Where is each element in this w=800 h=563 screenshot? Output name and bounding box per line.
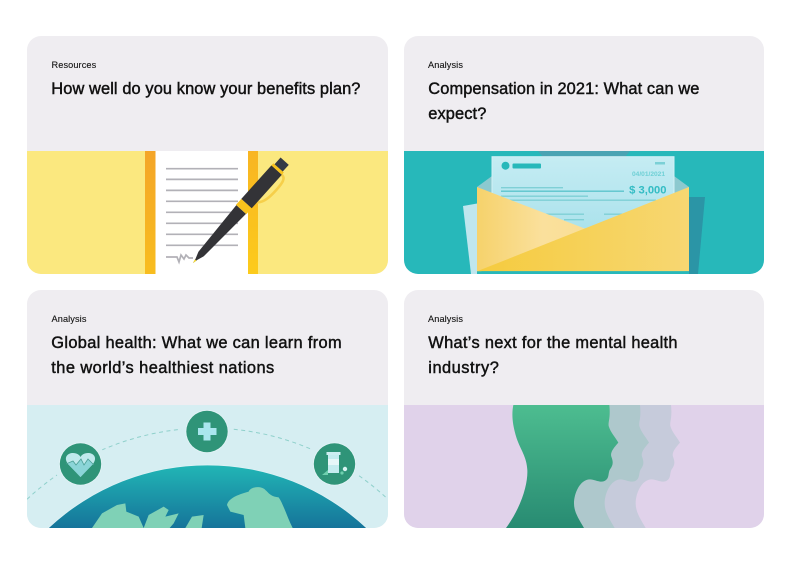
- heading: benefits plan: How well do you know your benefits plan?: [51, 80, 361, 98]
- heading: mental health: What’s next for the mental health: [428, 334, 678, 352]
- heading: global health: [51, 334, 342, 377]
- heading: compensation: [428, 80, 699, 123]
- heading: mental health: industry?: [428, 359, 499, 377]
- heading: global health: the world’s healthiest nations: [51, 359, 275, 377]
- heading: global health: Global health: What we can learn from: [51, 334, 342, 352]
- panel: global health card: [27, 290, 388, 528]
- category label: Analysis: Analysis: [428, 314, 463, 324]
- heading: compensation: expect?: [428, 105, 486, 123]
- icon: heart with pulse: [54, 438, 106, 490]
- panel: compensation card: [404, 36, 764, 274]
- icon: medicine bottle: [308, 438, 360, 490]
- illustration: globe with health icons: [27, 405, 388, 528]
- illustration: notebook and pen: [27, 151, 388, 274]
- illustration: cheque in envelope: [404, 151, 764, 274]
- heading: compensation: Compensation in 2021: What can we: [428, 80, 699, 98]
- category label: Analysis: Analysis: [52, 314, 87, 324]
- panel: benefits plan card: [27, 36, 388, 274]
- front head silhouette: [506, 405, 618, 528]
- second head silhouette: [537, 405, 649, 528]
- illustration: head silhouettes: [404, 405, 764, 528]
- icon: pen: [188, 157, 294, 272]
- icon: medical cross: [181, 406, 233, 458]
- category label: Analysis: Analysis: [428, 60, 463, 70]
- category label: Resources: Resources: [52, 60, 96, 70]
- globe: [48, 465, 367, 528]
- third head silhouette: [568, 405, 680, 528]
- panel: mental health card: [404, 290, 764, 528]
- heading: mental health: [428, 334, 678, 377]
- cheque amount: $ 3,000: [629, 184, 666, 196]
- cheque date: 04/01/2021: [632, 171, 665, 178]
